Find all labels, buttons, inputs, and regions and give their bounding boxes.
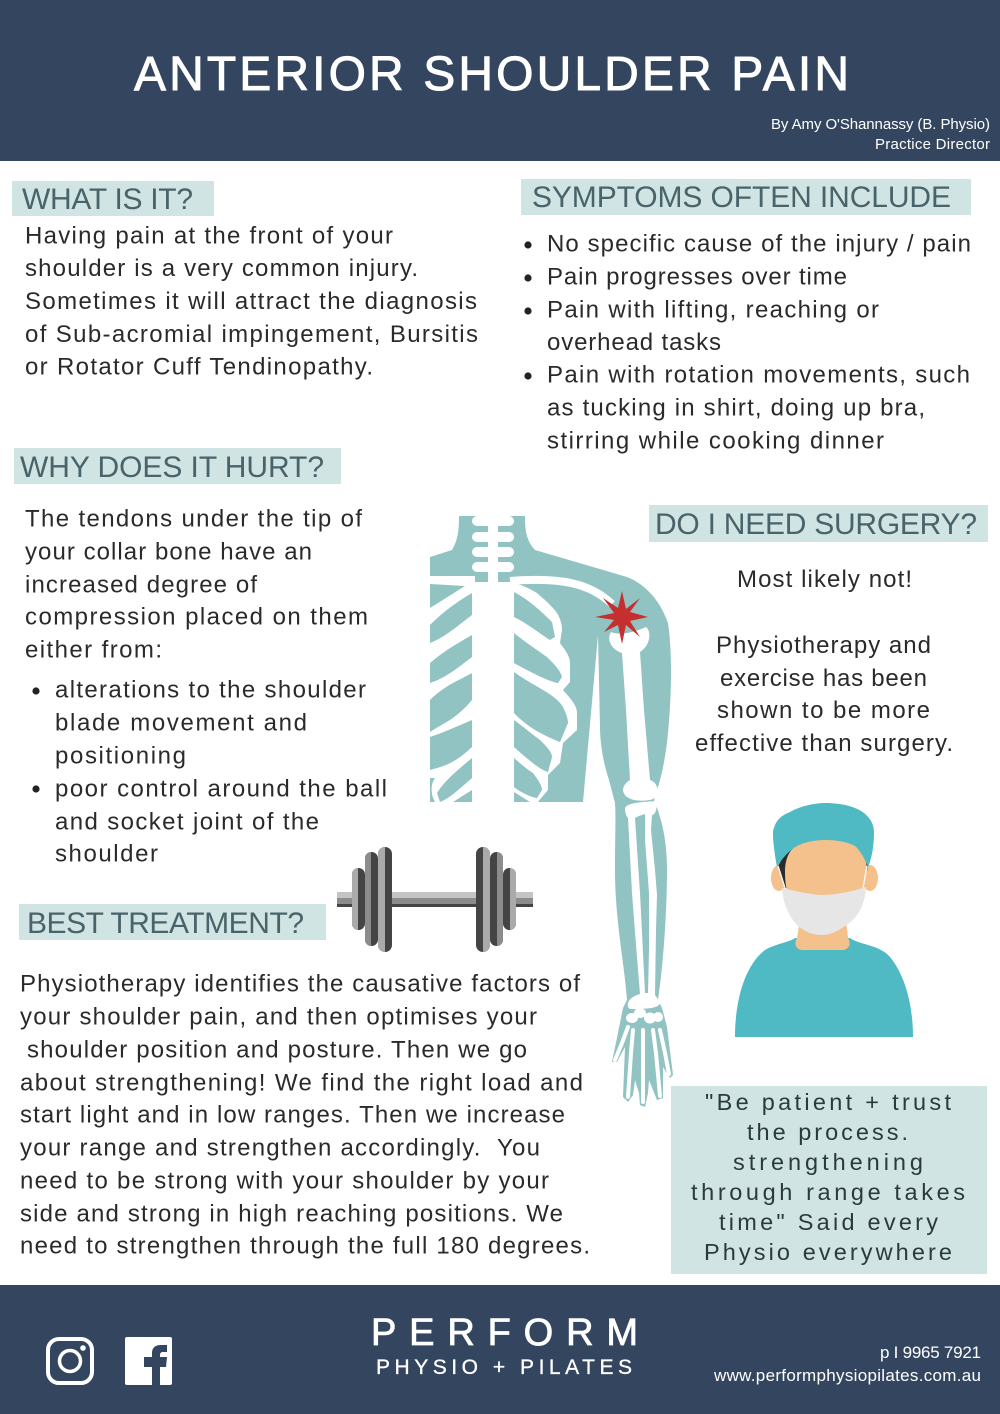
wrist and hand bones <box>626 1008 663 1024</box>
callout: quote: Physio everywhere <box>704 1239 952 1265</box>
panel: why does it hurt: The tendons under the tip of <box>25 506 362 532</box>
panel: why does it hurt: either from: <box>25 636 162 664</box>
callout: quote: "Be patient + trust <box>705 1089 951 1115</box>
panel: why does it hurt <box>14 448 387 868</box>
right ribs <box>514 583 577 803</box>
panel: do I need surgery: shown to be more <box>717 697 930 724</box>
panel: symptoms <box>521 179 971 454</box>
panel: why does it hurt: shoulder <box>55 840 158 868</box>
face <box>785 840 867 897</box>
panel: why does it hurt: increased degree of <box>25 572 257 598</box>
hair <box>778 845 868 888</box>
panel: symptoms: Pain with rotation movements, such <box>547 362 970 388</box>
panel: why does it hurt: alterations to the shoulder <box>55 676 366 704</box>
ears <box>771 865 787 891</box>
panel: why does it hurt: and socket joint of the <box>55 808 319 836</box>
panel: best treatment: start light and in low ranges. Then we increase <box>20 1102 565 1128</box>
mask straps <box>778 866 867 888</box>
mask <box>782 887 866 935</box>
panel: why does it hurt: positioning <box>55 742 186 770</box>
panel: what is it <box>12 181 478 380</box>
panel: symptoms: Pain progresses over time <box>547 264 847 290</box>
panel: best treatment <box>19 904 590 1260</box>
author credit <box>771 116 990 153</box>
logo: PHYSIO + PILATES <box>376 1356 632 1379</box>
panel: best treatment: need to strengthen through the full 180 degrees. <box>20 1232 590 1260</box>
panel: best treatment: about strengthening! We find the right load and <box>20 1070 583 1096</box>
panel: symptoms: overhead tasks <box>547 329 721 356</box>
header banner <box>0 0 1000 161</box>
panel: do I need surgery: DO I NEED SURGERY? <box>655 508 977 541</box>
panel: symptoms: stirring while cooking dinner <box>547 428 884 454</box>
icon: facebook <box>125 1337 172 1385</box>
footer banner <box>0 1285 1000 1414</box>
anatomical arm and torso illustration <box>430 516 673 1107</box>
panel: best treatment: side and strong in high reaching positions. We <box>20 1200 563 1228</box>
contact details: p I 9965 7921 <box>880 1343 981 1362</box>
panel: best treatment: your shoulder pain, and then optimises your <box>20 1004 537 1030</box>
panel: do I need surgery: Most likely not! <box>737 566 912 593</box>
callout: quote <box>671 1086 987 1274</box>
icon: dumbbell <box>337 847 533 952</box>
panel: what is it: Sometimes it will attract the diagnosis <box>25 288 477 315</box>
panel: best treatment: Physiotherapy identifies the causative factors of <box>20 970 580 998</box>
panel: what is it: or Rotator Cuff Tendinopathy. <box>25 354 373 380</box>
contact details: www.performphysiopilates.com.au <box>713 1366 981 1385</box>
panel: symptoms: No specific cause of the injury / pain <box>547 230 971 258</box>
panel: why does it hurt: blade movement and <box>55 710 307 736</box>
panel: why does it hurt: WHY DOES IT HURT? <box>20 451 324 484</box>
logo: PERFORM <box>371 1312 638 1354</box>
title: ANTERIOR SHOULDER PAIN <box>134 48 849 101</box>
collar bone <box>430 580 612 604</box>
icon: surgeon with mask <box>735 803 913 1037</box>
spine and vertebrae <box>472 516 514 803</box>
panel: best treatment: need to be strong with your shoulder by your <box>20 1168 549 1194</box>
panel: what is it: of Sub-acromial impingement, Bursitis <box>25 321 478 348</box>
panel: why does it hurt: your collar bone have an <box>25 538 312 566</box>
icon: pain star <box>595 591 648 644</box>
forearm bones <box>625 801 660 1009</box>
logo <box>371 1312 638 1379</box>
panel: do I need surgery: Physiotherapy and <box>716 632 931 659</box>
panel: why does it hurt: compression placed on them <box>25 604 368 630</box>
panel: best treatment: your range and strengthen accordingly. You <box>20 1134 540 1162</box>
panel: do I need surgery <box>649 505 988 757</box>
panel: best treatment: BEST TREATMENT? <box>27 907 304 940</box>
surgical cap <box>773 803 874 867</box>
panel: why does it hurt: poor control around the ball <box>55 776 387 802</box>
icon: instagram <box>48 1339 92 1383</box>
panel: best treatment: shoulder position and posture. Then we go <box>27 1036 527 1064</box>
callout: quote: strengthening <box>733 1149 923 1175</box>
panel: symptoms: as tucking in shirt, doing up bra, <box>547 394 925 422</box>
left ribs <box>430 584 472 803</box>
panel: what is it: WHAT IS IT? <box>22 183 193 216</box>
panel: symptoms: SYMPTOMS OFTEN INCLUDE <box>532 181 951 214</box>
surgeon neck <box>795 920 850 950</box>
panel: what is it: shoulder is a very common injury. <box>25 255 418 282</box>
callout: quote: through range takes <box>691 1179 965 1205</box>
surgeon body <box>735 938 913 1037</box>
upper arm bone <box>609 627 658 801</box>
panel: symptoms: Pain with lifting, reaching or <box>547 296 879 324</box>
callout: quote: time" Said every <box>719 1209 938 1235</box>
contact details <box>713 1343 981 1385</box>
callout: quote: the process. <box>747 1119 908 1145</box>
panel: do I need surgery: exercise has been <box>720 665 927 692</box>
silhouette <box>430 516 673 1107</box>
panel: what is it: Having pain at the front of your <box>25 222 393 250</box>
author credit: By Amy O'Shannassy (B. Physio) <box>771 116 990 133</box>
panel: do I need surgery: effective than surgery. <box>695 730 953 757</box>
author credit: Practice Director <box>875 136 990 153</box>
